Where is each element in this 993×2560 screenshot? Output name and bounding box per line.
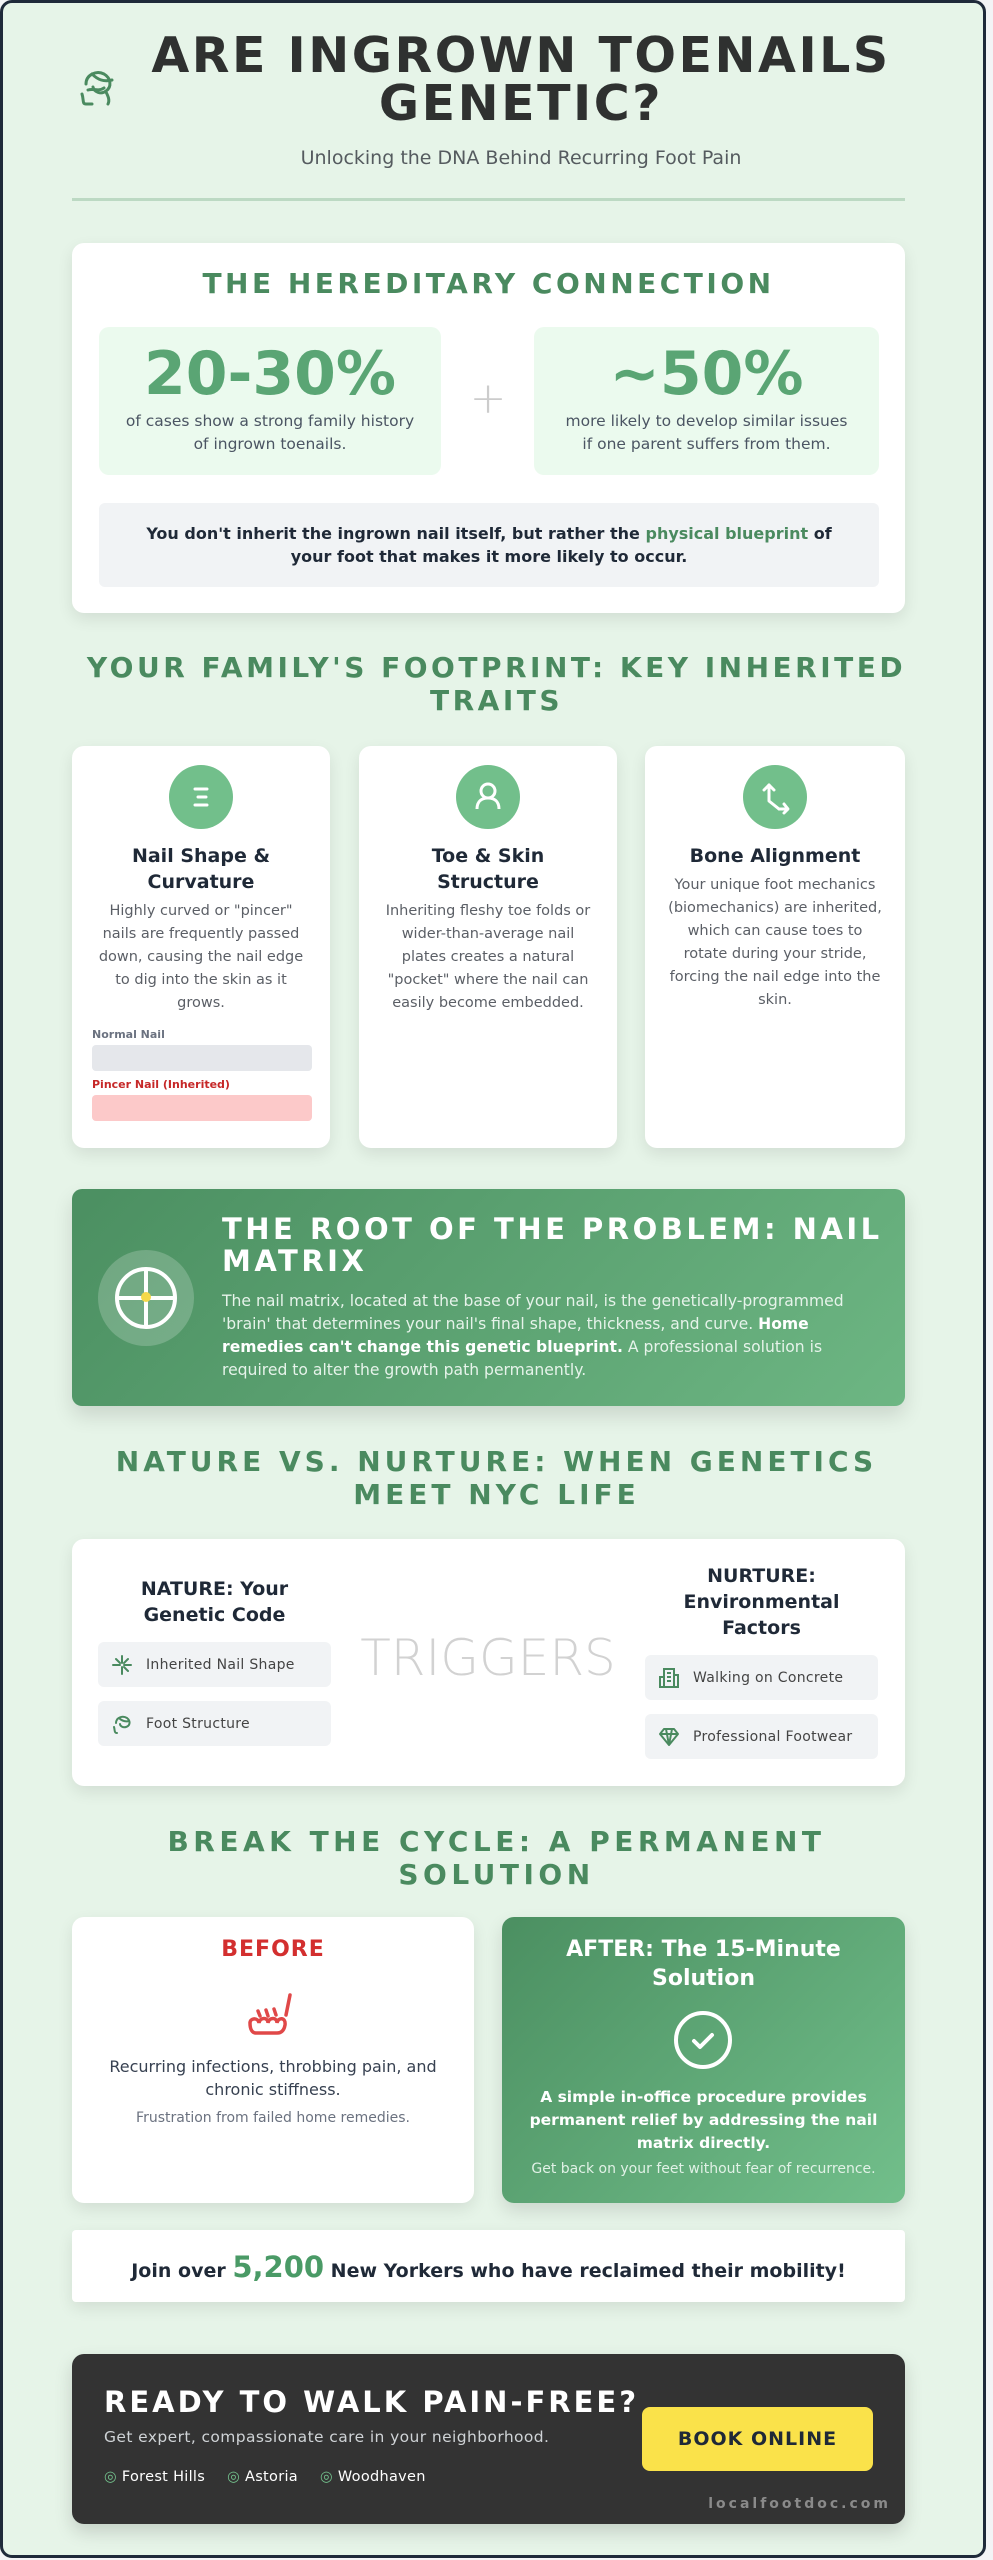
heading: nature vs nurture: NATURE VS. NURTURE: WHEN GENETICS <box>116 1445 877 1478</box>
heading: break the cycle <box>167 1825 826 1891</box>
icon: arrows <box>743 765 807 829</box>
subtitle: Unlocking the DNA Behind Recurring Foot Pain <box>301 147 741 169</box>
card: before: Frustration from failed home remedies. <box>136 2110 410 2126</box>
locations: ◎ Forest Hills <box>104 2469 205 2485</box>
locations: ◎ Woodhaven <box>320 2469 426 2485</box>
card: bone alignment: Your unique foot mechanics (biomechanics) are inherited, which can cause toes to rotate during your stride, forcing the nail edge into the skin. <box>668 877 882 1008</box>
icon: pain foot <box>248 1993 292 2035</box>
matrix title <box>222 1212 883 1278</box>
card: after: A simple in-office procedure provides permanent relief by addressing the nail matrix directly. <box>530 2088 877 2152</box>
stat: 20-30%: of cases show a strong family history <box>126 412 414 430</box>
card: toe & skin: Structure <box>437 871 539 893</box>
nurture title: Environmental <box>684 1591 839 1613</box>
heading: family footprint: YOUR FAMILY'S FOOTPRINT: KEY INHERITED <box>87 651 906 684</box>
item: footwear <box>645 1714 878 1759</box>
stat: ~50% <box>534 327 879 475</box>
heading: nature vs nurture: MEET NYC LIFE <box>353 1478 640 1511</box>
triggers label: TRIGGERS <box>360 1629 616 1687</box>
card: before <box>72 1917 474 2203</box>
item: concrete: Walking on Concrete <box>693 1670 843 1686</box>
banner: join 5,200 <box>72 2230 905 2302</box>
button: book online <box>642 2407 873 2471</box>
card: nail shape: Curvature <box>148 871 254 893</box>
card: after: Get back on your feet without fear of recurrence. <box>531 2161 876 2177</box>
item: foot structure <box>98 1701 331 1746</box>
locations: ◎ Astoria <box>227 2469 298 2485</box>
nature title <box>141 1578 288 1626</box>
title: ARE INGROWN TOENAILS <box>151 27 891 84</box>
header icon <box>80 71 114 106</box>
nurture title <box>684 1565 839 1639</box>
item: concrete <box>645 1655 878 1700</box>
plus sign: + <box>470 373 506 424</box>
matrix text: The nail matrix, located at the base of your nail, is the genetically-programmed 'brain' that determines your nail's final shape, thickness, and curve. Home remedies can't change this genetic blueprint. A professional solution is required to alter the growth path permanently. <box>222 1292 844 1379</box>
nail comparison <box>92 1028 312 1121</box>
card: nail shape: Highly curved or "pincer" nails are frequently passed down, causing the nail edge to dig into the skin as it grows. <box>99 903 303 1011</box>
note box: You don't inherit the ingrown nail itself, but rather the physical blueprint of <box>146 524 832 543</box>
locations <box>104 2469 426 2485</box>
heading: break the cycle: SOLUTION <box>398 1858 595 1891</box>
nurture title: NURTURE: <box>707 1565 816 1587</box>
item: footwear: Professional Footwear <box>693 1728 852 1744</box>
nature title: Genetic Code <box>144 1604 285 1626</box>
card: bone alignment: Bone Alignment <box>690 845 860 867</box>
card: before: BEFORE <box>221 1937 325 1962</box>
card: toe & skin <box>359 746 617 1148</box>
title: GENETIC? <box>379 75 663 132</box>
panel: hereditary connection <box>72 243 905 613</box>
panel: CTA <box>72 2354 905 2524</box>
heading: family footprint: TRAITS <box>430 684 563 717</box>
note box <box>99 503 879 587</box>
card: after <box>502 1917 905 2203</box>
panel: CTA: Get expert, compassionate care in your neighborhood. <box>104 2428 549 2446</box>
stat: ~50%: if one parent suffers from them. <box>582 435 831 453</box>
card: after: AFTER: The 15-Minute <box>566 1937 841 1962</box>
card: bone alignment <box>645 746 905 1148</box>
icon: matrix target <box>98 1250 194 1346</box>
icon: person <box>456 765 520 829</box>
cta title: READY TO WALK PAIN-FREE? <box>104 2385 639 2419</box>
stat: ~50%: more likely to develop similar issues <box>566 412 847 430</box>
stat: 20-30%: of ingrown toenails. <box>194 435 346 453</box>
card: before: Recurring infections, throbbing pain, and chronic stiffness. <box>109 2057 437 2099</box>
card: toe & skin: Inheriting fleshy toe folds or wider-than-average nail plates creates a natural "pocket" where the nail can easily become embedded. <box>386 903 590 1011</box>
panel: CTA: localfootdoc.com <box>708 2496 891 2512</box>
stat: 20-30% <box>99 327 441 475</box>
banner: join 5,200: Join over 5,200 New Yorkers who have reclaimed their mobility! <box>131 2250 846 2284</box>
note box: your foot that makes it more likely to occur. <box>291 547 687 566</box>
heading: nature vs nurture <box>116 1445 877 1511</box>
matrix title: THE ROOT OF THE PROBLEM: NAIL <box>222 1212 883 1246</box>
panel: nail matrix <box>72 1189 905 1406</box>
title <box>151 27 891 132</box>
item: inherited nail shape <box>98 1642 331 1687</box>
matrix title: MATRIX <box>222 1244 367 1278</box>
panel: nature vs nurture <box>72 1539 905 1786</box>
stat: ~50%: ~50% <box>610 339 803 409</box>
card: after: Solution <box>652 1966 755 1991</box>
heading: break the cycle: BREAK THE CYCLE: A PERMANENT <box>167 1825 826 1858</box>
stat: 20-30%: 20-30% <box>144 339 396 409</box>
nail comparison: Pincer Nail (Inherited) <box>92 1078 230 1091</box>
card: toe & skin: Toe & Skin <box>432 845 544 867</box>
item: inherited nail shape: Inherited Nail Shape <box>146 1656 295 1672</box>
heading: hereditary connection: THE HEREDITARY CONNECTION <box>202 267 775 300</box>
icon: check circle <box>674 2011 732 2069</box>
button: book online: BOOK ONLINE <box>678 2428 837 2450</box>
nature title: NATURE: Your <box>141 1578 288 1600</box>
card: nail shape <box>72 746 330 1148</box>
card: nail shape: Nail Shape & <box>132 845 270 867</box>
icon: nail lines <box>169 765 233 829</box>
nail comparison: Normal Nail <box>92 1028 165 1041</box>
heading: family footprint <box>86 651 906 717</box>
item: foot structure: Foot Structure <box>146 1716 250 1732</box>
nurture title: Factors <box>722 1617 801 1639</box>
